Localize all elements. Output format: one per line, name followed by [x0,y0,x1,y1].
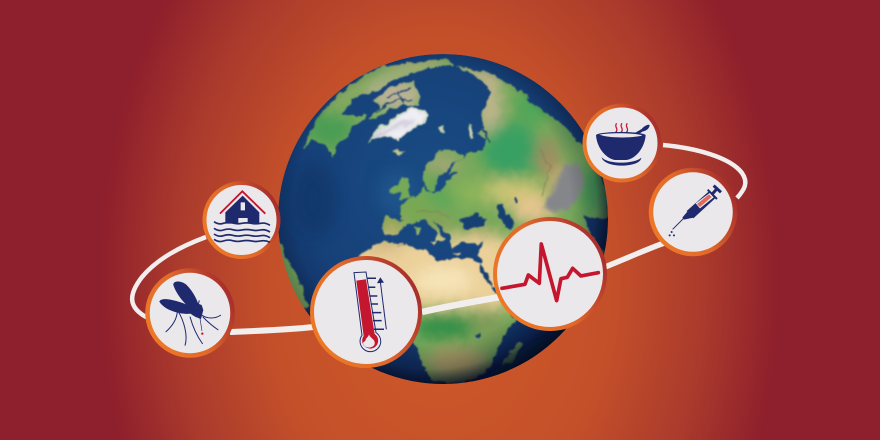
ring: thermometer to mosquito [230,327,314,332]
syringe plunger [712,186,721,194]
ring: syringe to heart rate [605,243,664,267]
globe [278,54,608,384]
icon badge: mosquito [148,270,232,356]
arctic snow islands [438,124,446,134]
nozzle [682,212,693,220]
flood waves [214,222,270,242]
mosquito wings [173,281,199,311]
mosquito legs [166,300,221,346]
mountain ridges [397,150,550,247]
arctic channels [377,88,490,143]
globe land masses [270,50,620,390]
icon badge: flooded house [204,183,278,257]
land base colour [270,50,620,390]
ring: mosquito to house [132,237,206,318]
globe lower right shadow [463,328,566,383]
spoon [629,125,650,138]
icon badge: soup bowl [584,106,660,180]
icon badge: heart rate [495,219,605,329]
house body [225,196,259,224]
orbit ring segments [132,145,745,332]
inland seas and channels [459,197,518,339]
icon badge: syringe [651,170,735,254]
ring: bowl to syringe [663,145,745,198]
thermometer outline [354,272,381,352]
flame [363,334,375,348]
globe edge shading [278,54,608,384]
ring: heart rate to thermometer [422,297,500,312]
greenland ice [368,106,430,143]
tibet plateau [543,163,585,213]
mosquito body [187,303,203,319]
ocean shelves [295,168,406,232]
heart rate trace [502,244,598,301]
scale ticks [367,278,384,329]
red roof [220,191,265,214]
rising arrow [380,282,386,329]
needle [673,218,684,229]
saucer [602,157,641,166]
land colour regions [300,57,607,380]
proboscis and blood drop [200,318,202,331]
globe ocean [278,54,608,384]
icon badge: thermometer [312,258,420,366]
mercury [356,279,378,349]
bowl [596,132,646,160]
drops [671,231,673,233]
syringe barrel [687,191,716,218]
infographic: globe with health icons [122,0,758,440]
steam [615,123,628,136]
